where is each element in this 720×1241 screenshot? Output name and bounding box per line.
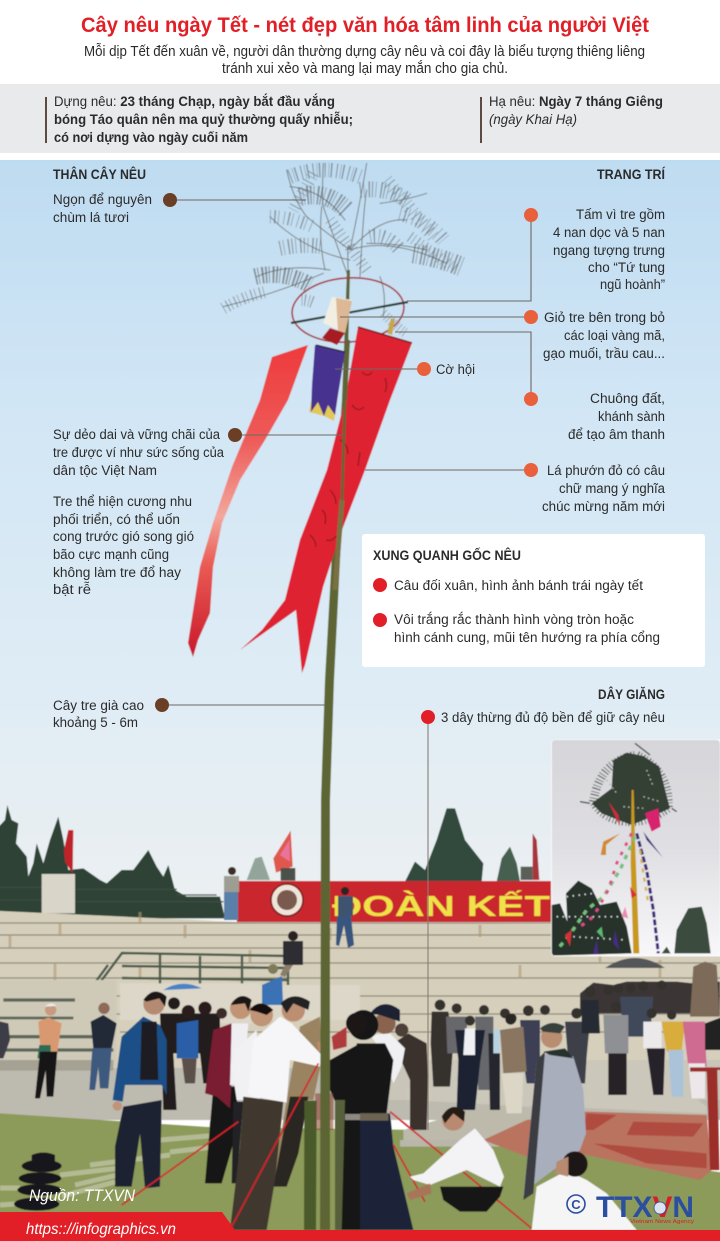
purple festival flag (309, 345, 345, 421)
railing (95, 951, 290, 986)
crouching man (440, 1187, 503, 1212)
callout: old bamboo height: Cây tre già cao (53, 698, 144, 713)
callout: guy ropes: DÂY GIĂNG (598, 687, 665, 702)
callout: clay bells (524, 391, 665, 442)
footer red bar with URL (0, 1212, 720, 1241)
callout: bamboo basket: gạo muối, trầu cau... (543, 346, 665, 361)
text: lowering date: (ngày Khai Hạ) (489, 111, 577, 127)
inset photograph (551, 739, 720, 956)
leader lines (162, 200, 531, 1130)
ground (0, 1060, 720, 1241)
standing crowd (431, 980, 720, 1113)
label group: thân cây nêu (53, 167, 242, 730)
callout: red banner: chúc mừng năm mới (542, 499, 665, 514)
red banner: ĐOÀN KẾT (332, 889, 550, 923)
man jeans (98, 1003, 110, 1014)
callout: guy ropes (421, 687, 665, 725)
red banner (237, 881, 552, 923)
item: couplets: Câu đối xuân, hình ảnh bánh trái ngày tết (394, 578, 643, 593)
callout: festival flag: Cờ hội (436, 362, 475, 377)
carpet (483, 1112, 712, 1180)
text: raising date (54, 92, 353, 145)
heading: thân cây nêu: THÂN CÂY NÊU (53, 167, 146, 182)
text: raising date: bóng Táo quân nên ma quỷ thường quấy nhiễu; (54, 111, 353, 127)
callout: bamboo frame: ngang tượng trưng (553, 243, 665, 258)
source credit: Nguồn: TTXVN (29, 1186, 136, 1205)
subtitle (84, 43, 645, 77)
panel: around the base (362, 534, 705, 667)
crowd behind (160, 1013, 220, 1110)
callout: festival flag (417, 362, 475, 377)
callout: toughness of bamboo: Sự dẻo dai và vững chãi của (53, 427, 220, 442)
text block: flexibility (53, 494, 194, 597)
robed elder (523, 1052, 586, 1197)
pole (631, 790, 639, 953)
text block: flexibility: cong trước gió song gió (53, 529, 194, 544)
subtitle: tránh xui xẻo và mang lại may mắn cho gia chủ. (222, 60, 508, 77)
callout: bamboo frame: Tấm vì tre gồm (576, 207, 665, 222)
stands (0, 910, 720, 1068)
callout: top of bamboo (53, 192, 177, 225)
second white shirt (232, 1030, 260, 1100)
main bamboo pole (320, 270, 350, 1230)
red banner left (188, 345, 308, 657)
callout: bamboo frame (524, 207, 665, 292)
callout: bamboo basket (524, 310, 665, 361)
text block: flexibility: Tre thể hiện cương nhu (53, 494, 192, 509)
callout: red banner: chữ mang ý nghĩa (559, 481, 665, 496)
copyright mark and TTXVN logo: TTXVN (596, 1191, 694, 1224)
text: raising date: Dựng nêu: 23 tháng Chạp, ngày bắt đầu vắng (54, 92, 335, 109)
callout: toughness of bamboo: tre được ví như sức sống của (53, 445, 224, 460)
callout: top of bamboo: chùm lá tươi (53, 210, 129, 225)
streamers (637, 833, 658, 953)
main man (230, 1097, 283, 1230)
callout: toughness of bamboo (53, 427, 242, 478)
text: raising date: có nơi dựng vào ngày cuối năm (54, 129, 248, 145)
callout: old bamboo height: khoảng 5 - 6m (53, 715, 138, 730)
helper poles (304, 1101, 317, 1230)
ropes (390, 1112, 532, 1228)
callout: guy ropes: 3 dây thừng đủ độ bền để giữ cây nêu (441, 710, 665, 725)
item: lime drawing: Vôi trắng rắc thành hình vòng tròn hoặc (394, 612, 634, 627)
black shirt man (357, 1043, 393, 1113)
callout: bamboo frame: cho “Tứ tung (588, 260, 665, 275)
text block: flexibility: phối triển, có thể uốn (53, 512, 180, 527)
callout: red banner: Lá phướn đỏ có câu (547, 463, 665, 478)
callout: old bamboo height (53, 698, 169, 730)
pole-base tan man (276, 1016, 322, 1168)
pole front piece (344, 340, 350, 401)
black-shirt man right (330, 1043, 360, 1230)
crowd right (348, 962, 720, 1230)
label group: trang trí (417, 167, 666, 514)
callout: clay bells: Chuông đất, (590, 391, 665, 406)
panel: dates band (0, 84, 720, 153)
people on stands (223, 866, 665, 1006)
maroon jacket (205, 1087, 240, 1183)
callout: bamboo frame: ngũ hoành” (600, 277, 665, 292)
seated man in front (532, 1171, 637, 1230)
text: lowering date: Hạ nêu: Ngày 7 tháng Giêng (489, 93, 663, 109)
callout: toughness of bamboo: dân tộc Việt Nam (53, 463, 157, 478)
text block: flexibility: bão cực mạnh cũng (53, 547, 169, 562)
copyright mark and TTXVN logo: C (571, 1197, 581, 1212)
red banner right (240, 327, 412, 673)
callout: top of bamboo: Ngọn để nguyên (53, 192, 152, 207)
callout: clay bells: để tạo âm thanh (568, 427, 665, 442)
copyright mark and TTXVN logo: Vietnam News Agency (630, 1219, 694, 1225)
woman camera (45, 1004, 56, 1016)
footer red bar with URL: https:://infographics.vn (26, 1221, 176, 1238)
item: lime drawing (373, 612, 660, 645)
text block: flexibility: bật rễ (53, 582, 91, 597)
callout: clay bells: khánh sành (598, 409, 665, 424)
item: lime drawing: hình cánh cung, mũi tên hướng ra phía cổng (394, 630, 660, 645)
crown (592, 753, 670, 825)
ropes (122, 1063, 318, 1227)
bottom trees (552, 881, 632, 956)
ornament: hoop with woven basket (290, 274, 408, 346)
callout: red banner (524, 463, 665, 514)
far trees and fence (0, 805, 295, 918)
callout: bamboo basket: Giỏ tre bên trong bỏ (544, 310, 665, 325)
man blue jacket (115, 1100, 162, 1188)
left people (0, 980, 367, 1230)
callout: bamboo frame: 4 nan dọc và 5 nan (553, 225, 665, 240)
text: lowering date (489, 93, 663, 127)
cap man (393, 1033, 428, 1130)
title: Cây nêu ngày Tết - nét đẹp văn hóa tâm linh của người Việt (81, 14, 649, 37)
heading: trang trí: TRANG TRÍ (597, 167, 666, 182)
bollard (14, 1152, 62, 1211)
table pillar (690, 1067, 720, 1170)
callout: bamboo basket: các loại vàng mã, (564, 328, 665, 343)
subtitle: Mỗi dịp Tết đến xuân về, người dân thường dựng cây nêu và coi đây là biểu tượng thiêng liêng (84, 43, 645, 60)
text block: flexibility: không làm tre đổ hay (53, 565, 181, 580)
panel heading: XUNG QUANH GỐC NÊU (373, 548, 521, 563)
foliage of the top of the bamboo (223, 163, 462, 333)
